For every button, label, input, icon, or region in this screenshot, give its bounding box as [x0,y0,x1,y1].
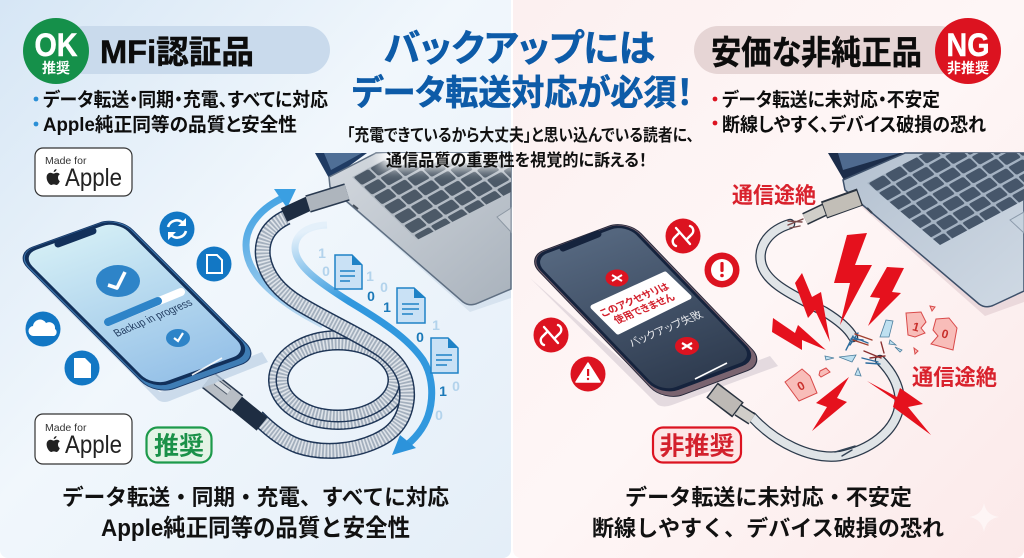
badge: OK recommended: OK [34,27,78,63]
data documents and binary digits: 1 [439,383,447,399]
icon: document outline [196,246,232,282]
summary text: left [62,485,449,542]
subtitle: 通信品質の重要性を視覚的に訴える！ [386,151,647,170]
right header pill [694,26,964,74]
heading: MFi certified: MFi認証品 [100,34,254,70]
debris and torn documents: 0 [795,378,808,394]
icon: warning triangle [570,356,606,392]
illustration: right laptop [828,153,1024,316]
badge: OK recommended: 推奨 [42,60,70,76]
alert box [593,274,689,332]
subtitle: 「充電できているから大丈夫」と思い込んでいる読者に、 [347,126,694,145]
progress bar [108,292,181,322]
illustration: certified braided cable [208,192,407,451]
data documents and binary digits: 0 [380,279,388,295]
arrow: downward data flow [295,225,432,455]
data documents and binary digits: 0 [416,329,424,345]
badge: Made for Apple top: Made for [45,155,87,167]
data documents and binary digits: 0 [435,407,443,423]
illustration: right phone [526,219,778,406]
bullet list: right [713,88,986,136]
badge: NG not recommended: NG [946,27,990,63]
phone text: backup failed: バックアップ失敗 [625,308,706,350]
data documents and binary digits: 1 [432,317,440,333]
tag: not recommended [653,428,741,462]
data documents and binary digits: 1 [366,268,374,284]
data documents and binary digits: 0 [367,288,375,304]
icon: exclamation [704,252,740,288]
heading: cheap non-genuine: 安価な非純正品 [711,34,922,71]
tag: recommended: 推奨 [154,432,204,460]
alert box: 使用できません [611,291,678,326]
tag: not recommended: 非推奨 [659,432,735,460]
badge: Made for Apple bottom: Apple [65,431,122,459]
arrow: upward data flow [246,189,323,325]
badge: Made for Apple top: Apple [65,164,122,192]
left header pill [60,26,330,74]
illustration: damaged cable [712,197,900,457]
bullet list: left: データ転送・同期・充電、すべてに対応 [43,88,328,111]
badge: NG not recommended: 非推奨 [947,60,989,76]
badge: Made for Apple bottom [35,414,132,464]
panel: right background [513,0,1024,558]
data documents and binary digits: 0 [452,378,460,394]
debris and torn documents: 0 [940,326,950,342]
summary text: right: 断線しやすく、デバイス破損の恐れ [592,516,944,541]
illustration: left phone [14,216,268,402]
bullet list: right: データ転送に未対応・不安定 [722,88,940,111]
debris and torn documents: 1 [911,319,921,335]
panel: left background [0,0,511,558]
badge: OK recommended [23,18,89,84]
summary text: left: Apple純正同等の品質と安全性 [101,515,410,542]
label: communication lost upper: 通信途絶 [732,183,816,208]
illustration: left laptop [315,152,512,312]
summary text: right: データ転送に未対応・不安定 [625,485,912,510]
alert box: このアクセサリは [598,281,673,319]
main title: バックアップには [384,28,655,69]
phone text: backup in progress: Backup in progress [112,297,195,339]
bullet list: left: Apple純正同等の品質と安全性 [43,114,297,136]
icon: large check [96,265,140,297]
icon: screen error bottom [675,337,699,355]
data documents and binary digits: 1 [383,299,391,315]
main title [352,28,693,113]
icon: sync [160,212,194,246]
data documents and binary digits: 1 [318,245,326,261]
icon: broken link bottom [534,318,568,352]
icon: document solid [64,350,100,386]
bullet list: left [34,88,328,136]
icon: sparkle watermark [969,503,999,532]
lightning bolts [772,233,931,435]
summary text: right [592,485,944,541]
badge: NG not recommended [935,18,1001,84]
label: communication lost lower: 通信途絶 [912,365,997,390]
bullet list: right: 断線しやすく、デバイス破損の恐れ [722,113,986,136]
data documents and binary digits: 0 [322,263,330,279]
icon: broken link top [666,218,700,254]
tag: recommended [146,428,212,462]
main title: データ転送対応が必須！ [352,73,693,113]
icon: cloud [26,312,60,346]
summary text: left: データ転送・同期・充電、すべてに対応 [62,485,449,510]
icon: small check [166,329,190,347]
badge: Made for Apple bottom: Made for [45,422,87,434]
subtitle [347,126,694,170]
icon: screen error top [606,270,628,286]
data documents and binary digits [318,245,460,423]
debris and torn documents [785,306,957,401]
badge: Made for Apple top [35,148,132,196]
